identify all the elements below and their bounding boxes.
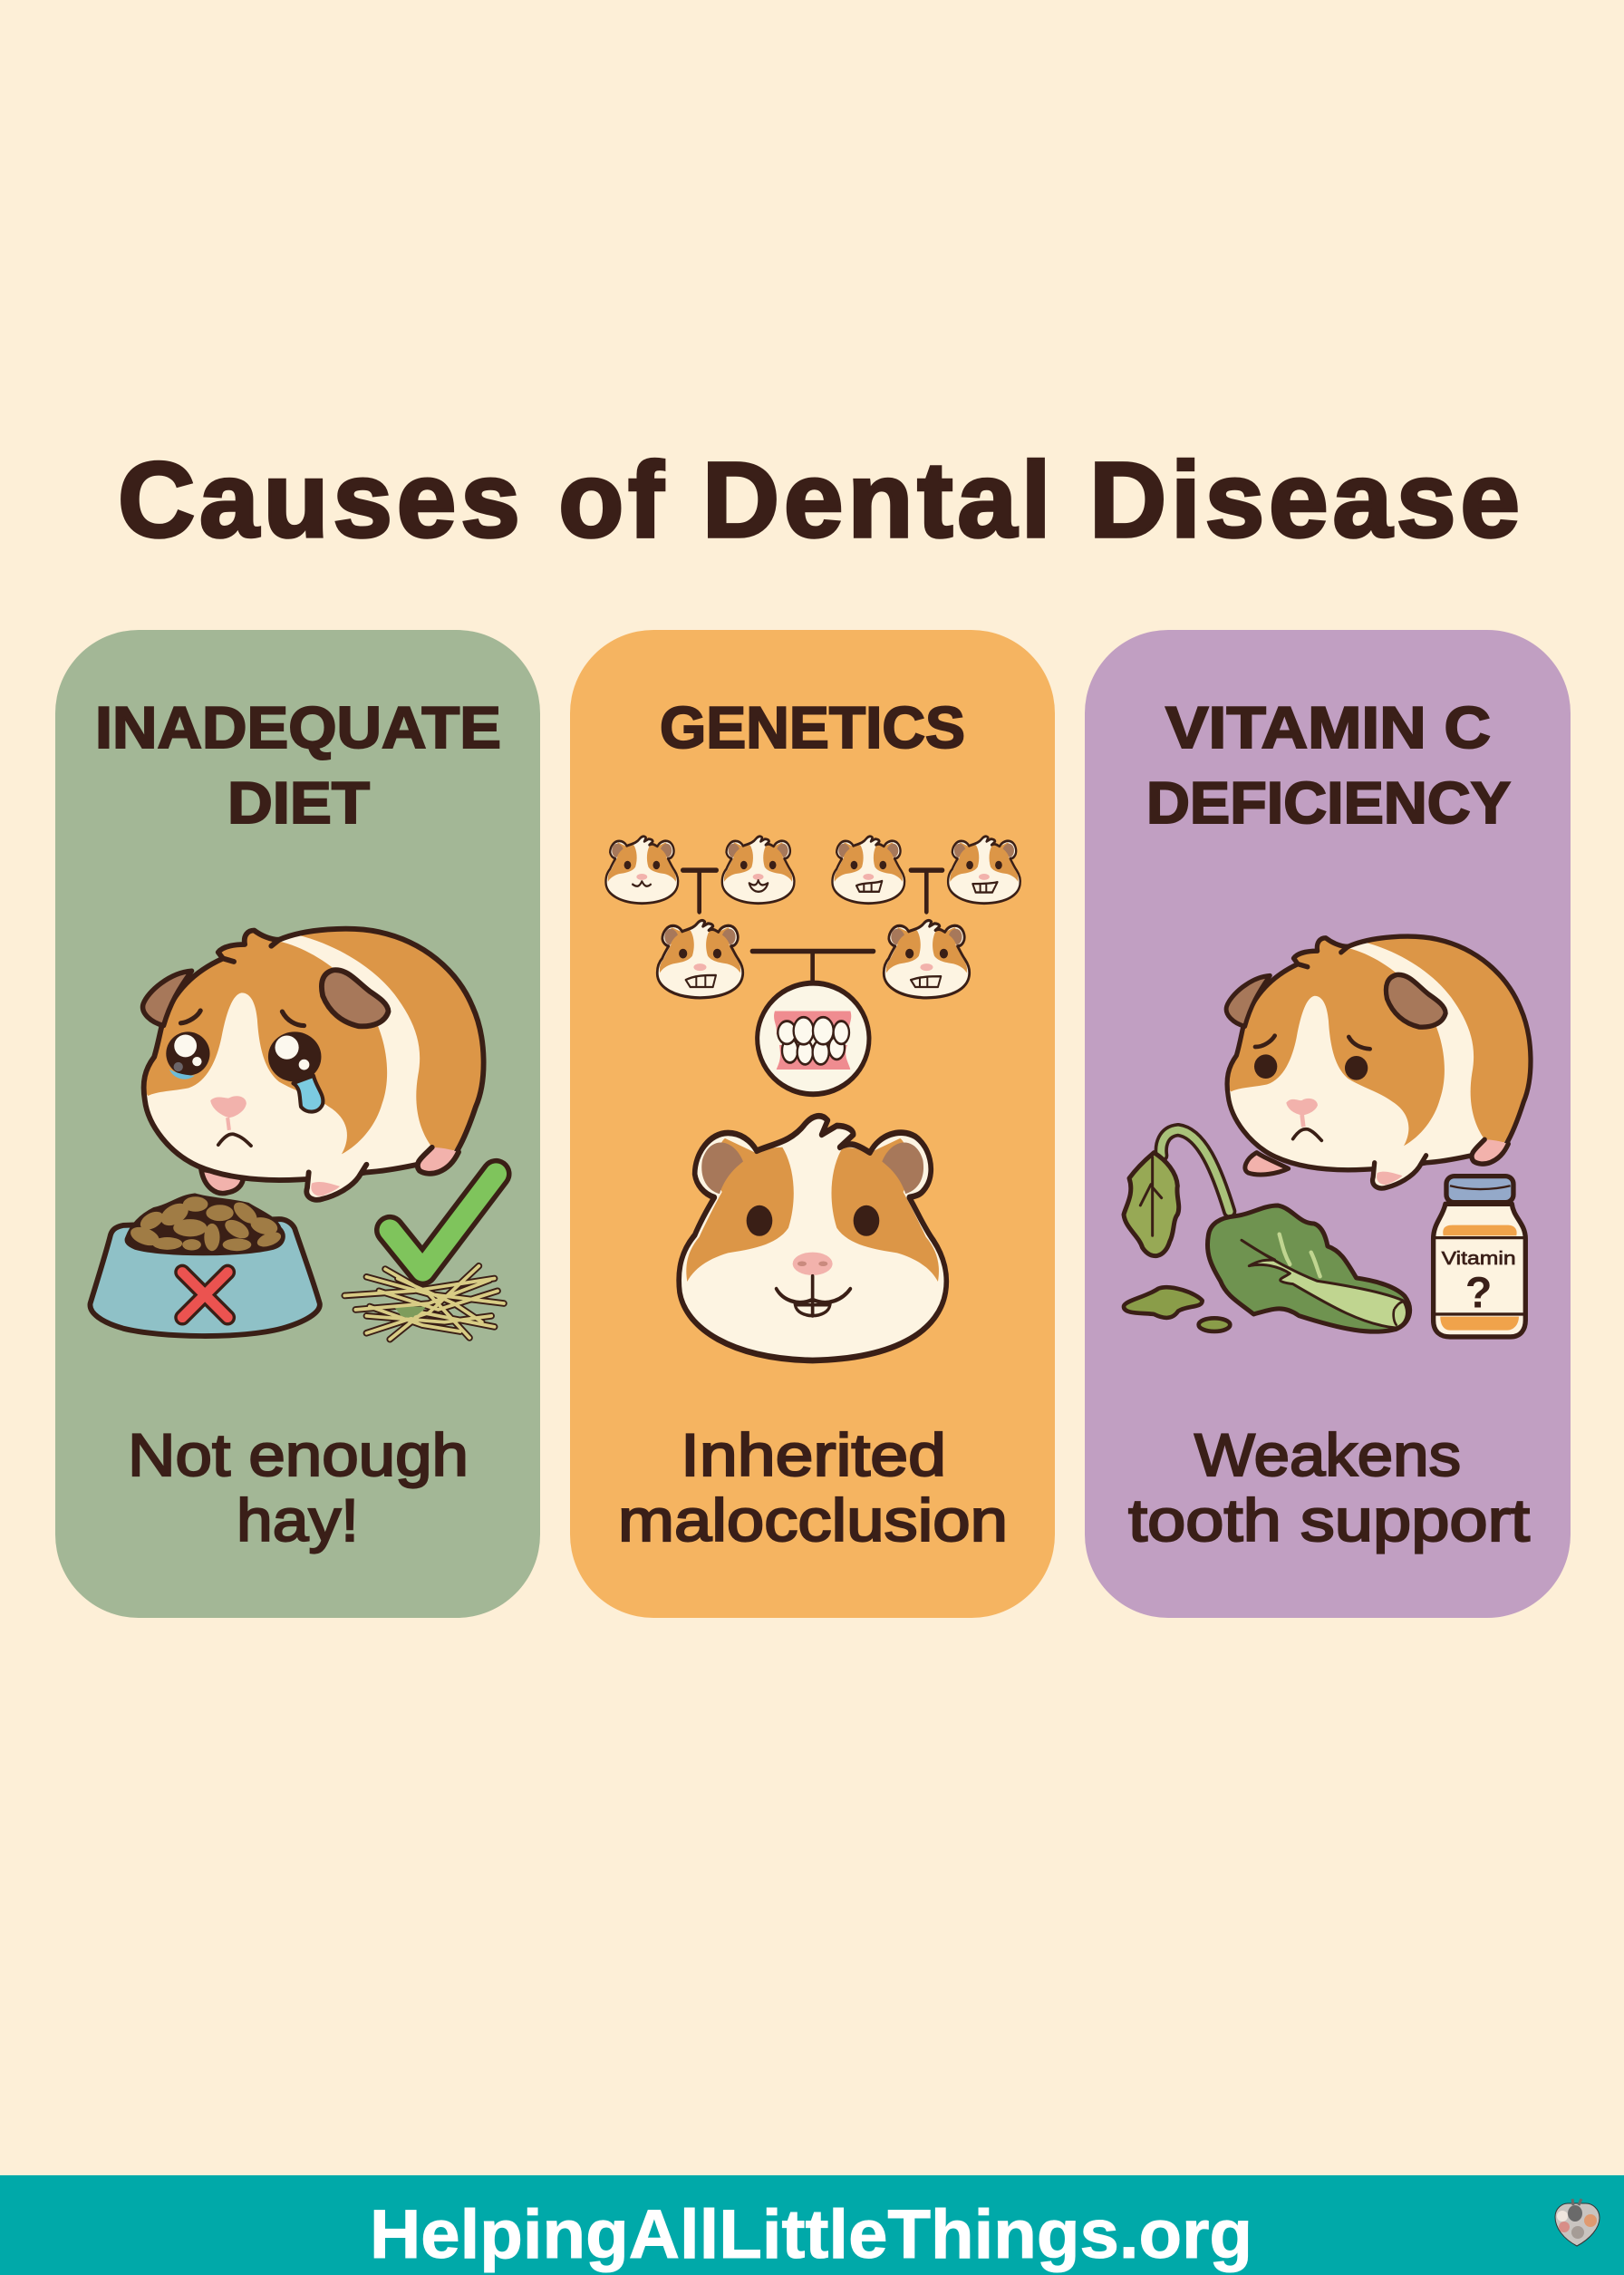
caption: not enough hay: hay!: [237, 1486, 359, 1554]
caption: inherited malocclusion: Inherited: [681, 1421, 946, 1488]
caption: weakens tooth support: Weakens: [1194, 1421, 1461, 1488]
sad guinea pig: [1217, 934, 1531, 1188]
food bowl with kibble: [90, 1196, 320, 1336]
panel: inadequate diet: [55, 630, 540, 1618]
pedigree connector lines: [682, 870, 942, 984]
question mark: ?: [1465, 1269, 1492, 1318]
caption: not enough hay: Not enough: [128, 1421, 469, 1488]
heading: inadequate diet: [95, 694, 501, 836]
magnified misaligned teeth: [758, 983, 869, 1094]
heading: inadequate diet: DIET: [227, 770, 370, 836]
small guinea pig heads: [605, 837, 1020, 998]
heading: vitamin c deficiency: DEFICIENCY: [1146, 770, 1511, 836]
caption: inherited malocclusion: malocclusion: [618, 1486, 1008, 1554]
red x mark: [182, 1273, 227, 1318]
caption: weakens tooth support: tooth support: [1128, 1486, 1530, 1554]
heading: vitamin c deficiency: [1146, 694, 1511, 836]
illustration: crying guinea pig, bowl, hay: [90, 925, 504, 1340]
logo: heart of small animals: [1555, 2199, 1600, 2246]
illustration: family tree of guinea pigs: [605, 837, 1020, 1360]
panel: vitamin c deficiency: [1085, 630, 1571, 1618]
vitamin bottle: [1434, 1176, 1525, 1337]
sad face and front paw: [1245, 1036, 1370, 1175]
caption: not enough hay: [128, 1421, 469, 1554]
panel background green: [55, 630, 540, 1618]
heading: vitamin c deficiency: VITAMIN C: [1165, 694, 1491, 760]
vitamin label text: Vitamin: [1442, 1249, 1516, 1269]
heading: genetics: GENETICS: [660, 694, 965, 760]
panel background purple: [1085, 630, 1571, 1618]
footer website text: HelpingAllLittleThings.org: [370, 2196, 1252, 2273]
wilted lettuce: [1124, 1130, 1410, 1331]
crying guinea pig: [132, 925, 484, 1200]
title: Causes of Dental Disease: [118, 440, 1520, 560]
heading: inadequate diet: INADEQUATE: [95, 694, 501, 760]
footer banner: [0, 2175, 1624, 2275]
caption: weakens tooth support: [1128, 1421, 1530, 1554]
illustration: face, wilted greens, bottle: [1124, 1036, 1525, 1337]
hay pile: [344, 1266, 504, 1340]
large guinea pig head: [679, 1116, 946, 1360]
caption: inherited malocclusion: [618, 1421, 1008, 1554]
panel background orange: [570, 630, 1055, 1618]
green check mark: [390, 1174, 496, 1271]
small mouths and crooked teeth: [632, 880, 998, 987]
panel: genetics: [570, 630, 1055, 1618]
